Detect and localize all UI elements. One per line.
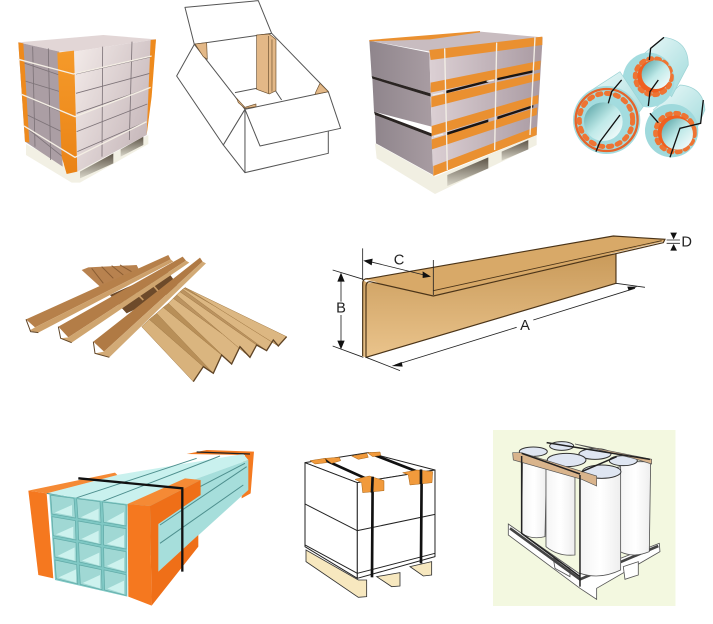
rolls: [522, 453, 651, 576]
tube cell grid: [49, 494, 127, 597]
angle strip 1: [26, 255, 173, 333]
coil: right: [645, 85, 705, 157]
small stacked angle ends: [82, 265, 140, 287]
cube: [305, 453, 435, 578]
panel: wrapped pallet with orange corners: [18, 35, 156, 183]
inner tan corner protectors: [195, 34, 328, 108]
black gaps between strips: [446, 70, 534, 135]
far orange end: [187, 450, 254, 498]
pale green background: [493, 430, 676, 606]
panel: stacked sheets on pallet: [369, 31, 543, 194]
straps: [522, 443, 650, 587]
teal body: [47, 454, 248, 504]
angle strip 2: [58, 257, 189, 343]
angle strip 3: [93, 258, 206, 357]
coil: top: [623, 37, 688, 107]
black strap: [78, 478, 182, 572]
roll tops: [519, 442, 637, 478]
corrugated sheet: [142, 288, 287, 382]
panel: strapped white cube on wooden pallet: [305, 452, 435, 597]
panel: paper rolls on pallet with angle on top: [493, 430, 676, 606]
pallet: [508, 524, 660, 599]
left orange corner: [28, 473, 117, 578]
right orange corner: [128, 478, 201, 606]
panel: cardboard angles and corrugated sheet: [26, 255, 287, 382]
panel: bundled square tubes with orange corners: [28, 450, 254, 606]
dimension labels: D: [681, 235, 692, 251]
protector body: [363, 236, 665, 357]
coil: left: [573, 72, 643, 154]
straps: [323, 453, 422, 577]
dimension lines: [333, 240, 680, 371]
orange corner strips: [18, 39, 156, 174]
dimension labels: A: [520, 318, 530, 334]
dimension labels: C: [394, 252, 405, 268]
arrowheads: [337, 233, 677, 367]
pallet: [306, 550, 432, 597]
panel: steel coils with orange cushions: [573, 37, 705, 157]
tan angle: front strip: [513, 444, 652, 486]
orange corner pads: [310, 452, 433, 493]
dimension labels: B: [336, 301, 346, 317]
dimension labels: [336, 235, 692, 334]
orange horizontal strips: [369, 31, 542, 176]
panel: edge protector dimension diagram: [333, 233, 692, 371]
panel: open carton with corner protectors: [177, 1, 341, 173]
